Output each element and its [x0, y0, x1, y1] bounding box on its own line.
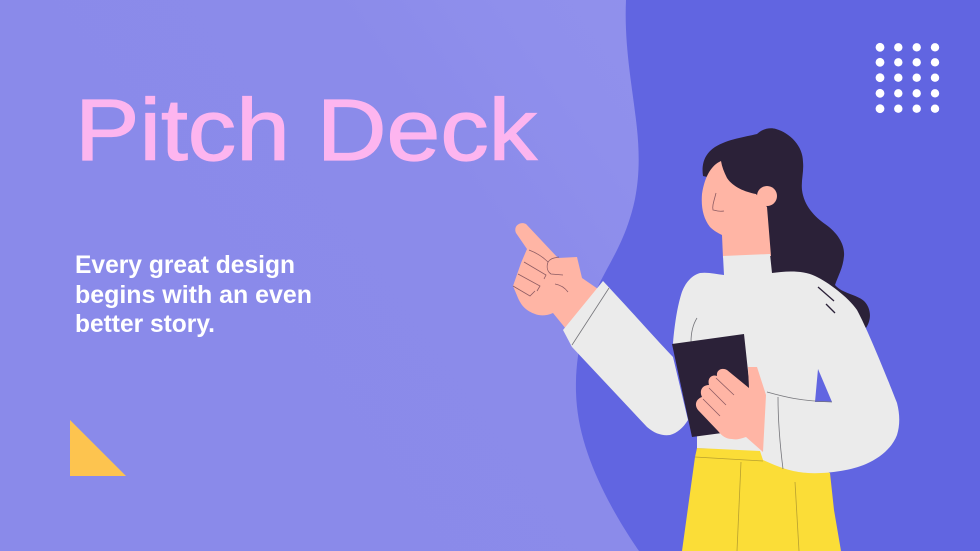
- skirt: [682, 448, 841, 551]
- notebook: [672, 334, 750, 437]
- neck and face: [702, 161, 771, 258]
- woman illustration: [513, 128, 899, 551]
- skirt seams: [695, 457, 799, 551]
- title: Pitch Deck: [75, 82, 538, 179]
- shirt fold lines: [691, 318, 832, 469]
- icon: yellow triangle: [70, 420, 126, 476]
- holding hand: [696, 367, 766, 452]
- subtitle text: begins with an even: [75, 281, 312, 309]
- subtitle text: Every great design: [75, 251, 295, 279]
- dot grid: [876, 43, 939, 113]
- shirt sleeve: [563, 281, 688, 435]
- waist gap triangle: [815, 369, 832, 402]
- sleeve cuff line: [572, 288, 609, 345]
- subtitle text: [75, 251, 312, 338]
- shirt torso and right arm: [673, 254, 899, 473]
- subtitle text: better story.: [75, 310, 215, 338]
- blue wave panel: [576, 0, 980, 551]
- face line: [713, 193, 724, 211]
- shoulder creases: [818, 287, 835, 313]
- pointing hand: [513, 223, 598, 329]
- finger lines: [703, 378, 734, 416]
- hair: [703, 128, 870, 328]
- hand finger lines: [513, 250, 568, 296]
- ear: [757, 186, 777, 206]
